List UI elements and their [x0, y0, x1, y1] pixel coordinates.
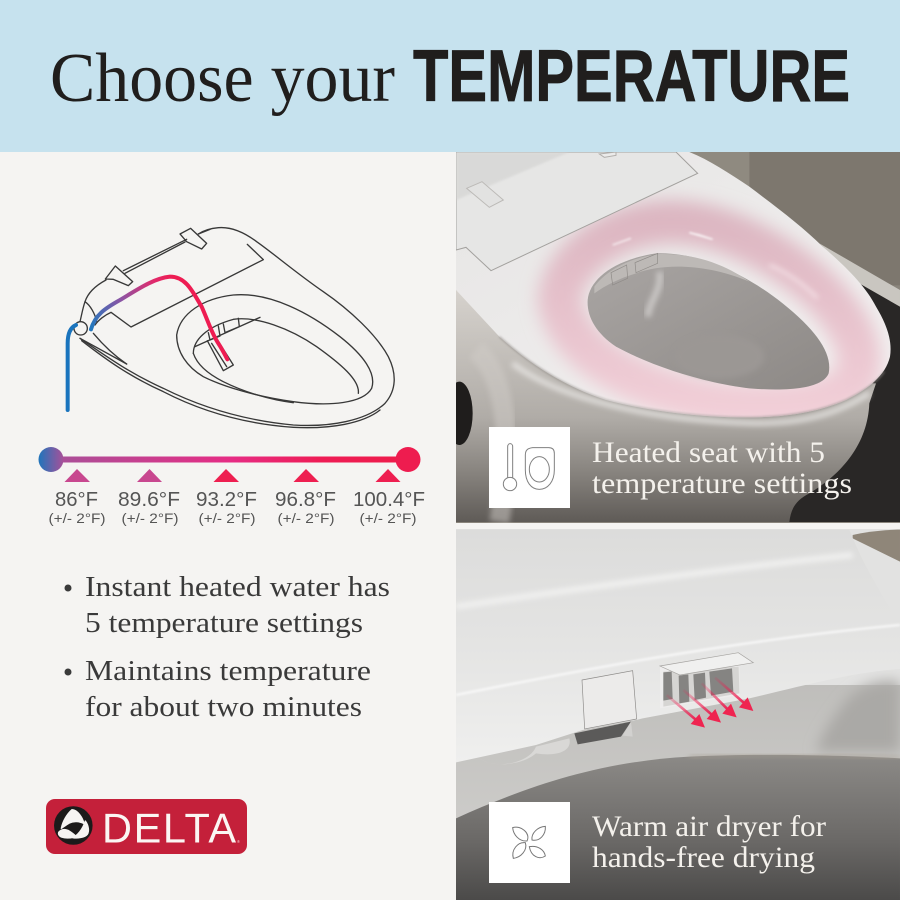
title: Choose your: Choose your	[50, 40, 395, 117]
temperature labels: (+/- 2°F)	[198, 510, 256, 526]
caption: warm air dryer	[489, 802, 826, 883]
wall corner	[853, 530, 900, 562]
seat highlights	[689, 233, 713, 239]
seat pink glow	[559, 222, 859, 406]
bullet list: Instant heated water has	[85, 571, 390, 603]
bullet list: 5 temperature settings	[85, 607, 363, 639]
lower bowl region	[456, 685, 900, 818]
temperature labels: (+/- 2°F)	[278, 510, 334, 526]
header band	[0, 0, 900, 152]
dryer vent	[660, 653, 753, 728]
temperature labels: 89.6°F	[118, 489, 180, 511]
caption: heated seat	[489, 427, 852, 508]
caption text: Warm air dryer for	[592, 810, 826, 843]
floor	[789, 284, 900, 522]
Delta logo	[46, 799, 247, 854]
nozzle housing detail	[611, 253, 658, 285]
baseboard	[819, 243, 900, 307]
upper seat seam	[456, 152, 569, 200]
hot air arrows	[667, 678, 746, 721]
Delta logo: ®	[237, 839, 240, 844]
scale bar	[55, 456, 408, 462]
seat hole	[588, 253, 829, 390]
hinge tab	[467, 182, 503, 207]
cold water inlet hose	[68, 325, 76, 410]
bullet list: Maintains temperature	[85, 655, 371, 687]
temperature labels: 93.2°F	[196, 489, 257, 511]
caption text: Heated seat with 5	[592, 436, 825, 469]
temperature labels: 96.8°F	[275, 489, 336, 511]
rubber bumper	[504, 738, 570, 764]
seat lip	[499, 337, 884, 417]
icon box: fan	[489, 802, 570, 883]
temperature labels: 100.4°F	[353, 489, 425, 511]
cold end marker	[38, 447, 64, 472]
photo: warm air dryer	[456, 529, 900, 900]
temperature labels: (+/- 2°F)	[122, 510, 178, 526]
caption text: hands-free drying	[592, 841, 815, 874]
temperature labels: (+/- 2°F)	[48, 510, 106, 526]
temperature pointers	[64, 469, 400, 482]
diagram: bidet seat line drawing with water pipe	[68, 228, 394, 428]
bullet list	[64, 571, 390, 723]
temperature labels: 86°F	[55, 489, 98, 511]
hot end marker	[396, 447, 420, 472]
heated water pipe	[91, 277, 227, 359]
bowl	[456, 290, 876, 522]
Delta logo: DELTA	[102, 804, 236, 852]
temperature labels	[48, 489, 425, 526]
temperature scale	[38, 447, 425, 526]
wall	[749, 152, 900, 285]
control panel lid	[456, 152, 698, 271]
caption text: temperature settings	[592, 467, 852, 500]
seat base	[456, 152, 891, 417]
caption text	[592, 810, 826, 874]
nozzle door	[574, 722, 631, 744]
caption text	[592, 436, 852, 500]
photo: heated seat	[446, 152, 900, 523]
temperature labels: (+/- 2°F)	[360, 510, 416, 526]
seat surface	[456, 538, 853, 762]
dark bowl interior	[456, 755, 900, 900]
bullet list: for about two minutes	[85, 691, 362, 723]
icon box: thermometer and seat	[489, 427, 570, 508]
